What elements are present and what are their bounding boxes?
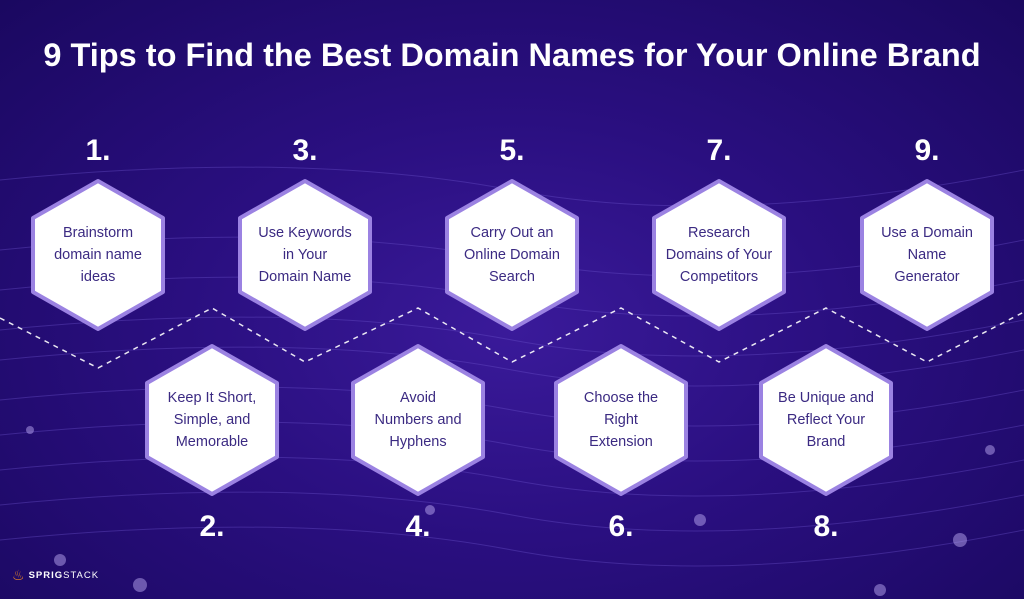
logo: ♨ xyxy=(12,566,26,582)
hexagon 3: Domain Name xyxy=(259,269,351,285)
hexagon 4: Hyphens xyxy=(389,434,447,450)
hexagon 8: Reflect Your xyxy=(787,412,865,428)
logo xyxy=(12,566,99,582)
hexagon 2: Simple, and xyxy=(174,412,250,428)
hexagon 5: Search xyxy=(489,269,535,285)
hexagon 3 xyxy=(238,179,372,331)
hexagon 6 xyxy=(554,344,688,496)
hexagon 6: Right xyxy=(604,412,638,428)
hexagon 7 xyxy=(652,179,786,331)
dashed zigzag xyxy=(0,308,1024,368)
hexagon 1: domain name xyxy=(54,247,142,263)
hexagon 8 xyxy=(759,344,893,496)
hexagon 5 xyxy=(445,179,579,331)
logo: SPRIG xyxy=(29,570,63,580)
hexagon 1 xyxy=(31,179,165,331)
number 6: 6. xyxy=(608,510,634,543)
hexagon 4 xyxy=(351,344,485,496)
hexagon 2: Memorable xyxy=(176,434,248,450)
hexagon 4: Numbers and xyxy=(374,412,462,428)
number 3: 3. xyxy=(292,134,318,167)
hexagon 7: Research xyxy=(688,225,750,241)
hexagon 9: Name xyxy=(908,247,946,263)
hexagon 6: Extension xyxy=(589,434,653,450)
hexagon 9: Generator xyxy=(894,269,960,285)
hexagon 7: Domains of Your xyxy=(666,247,772,263)
hexagon 2 xyxy=(145,344,279,496)
number 5: 5. xyxy=(499,134,525,167)
hexagon 8: Be Unique and xyxy=(778,390,874,406)
hexagon 9 xyxy=(860,179,994,331)
number 8: 8. xyxy=(813,510,839,543)
number 2: 2. xyxy=(199,510,225,543)
number 7: 7. xyxy=(706,134,732,167)
hexagon 9: Use a Domain xyxy=(881,225,973,241)
hexagon 3: in Your xyxy=(283,247,327,263)
hexagon 6: Choose the xyxy=(584,390,658,406)
number 4: 4. xyxy=(405,510,431,543)
hexagon 8: Brand xyxy=(807,434,845,450)
title: 9 Tips to Find the Best Domain Names for Your Online Brand xyxy=(43,37,981,73)
hexagon 1: Brainstorm xyxy=(63,225,133,241)
hexagon 5: Online Domain xyxy=(464,247,560,263)
hexagon 5: Carry Out an xyxy=(470,225,553,241)
hexagon 3: Use Keywords xyxy=(258,225,352,241)
logo: STACK xyxy=(63,570,99,580)
hexagon 7: Competitors xyxy=(680,269,758,285)
number 1: 1. xyxy=(85,134,111,167)
hexagon 2: Keep It Short, xyxy=(168,390,256,406)
hexagon 4: Avoid xyxy=(400,390,436,406)
number 9: 9. xyxy=(914,134,940,167)
hexagon 1: ideas xyxy=(81,269,115,285)
